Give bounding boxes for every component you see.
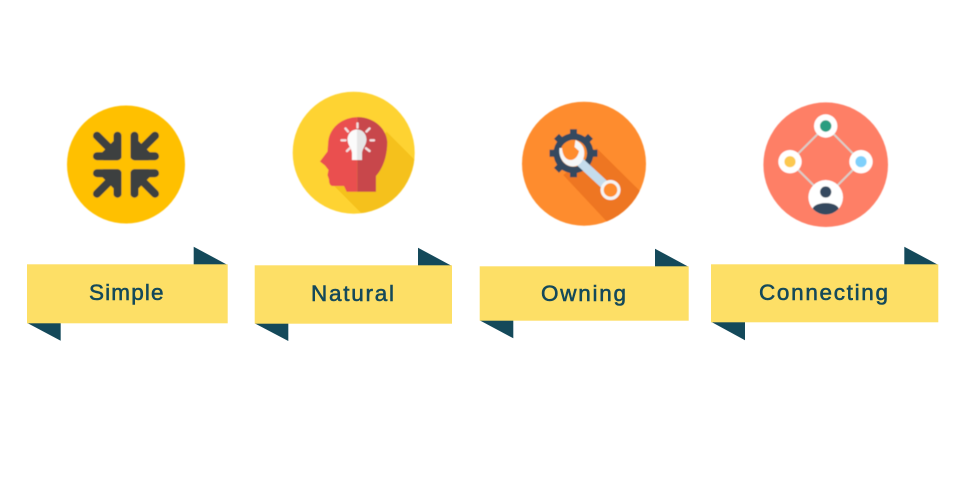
item: Natural [255, 92, 452, 341]
ribbon: Simple [27, 247, 228, 341]
icon: network [763, 102, 888, 227]
infographic [27, 90, 938, 341]
gear [550, 129, 598, 177]
icon: head with light bulb [292, 90, 416, 215]
item: Connecting [711, 102, 938, 340]
bulb [342, 124, 374, 160]
wrench [559, 140, 619, 198]
label: Simple: Simple [89, 280, 164, 305]
ribbon: Natural [255, 248, 452, 341]
item: Simple [27, 106, 228, 341]
label: Owning: Owning [541, 281, 626, 306]
label: Connecting: Connecting [759, 280, 888, 305]
icon: gear and wrench [522, 102, 650, 240]
ribbon: Owning [480, 249, 689, 338]
ribbon: Connecting [711, 247, 938, 340]
icon: inward arrows [67, 106, 185, 224]
label: Natural: Natural [311, 281, 394, 306]
item: Owning [480, 102, 689, 338]
